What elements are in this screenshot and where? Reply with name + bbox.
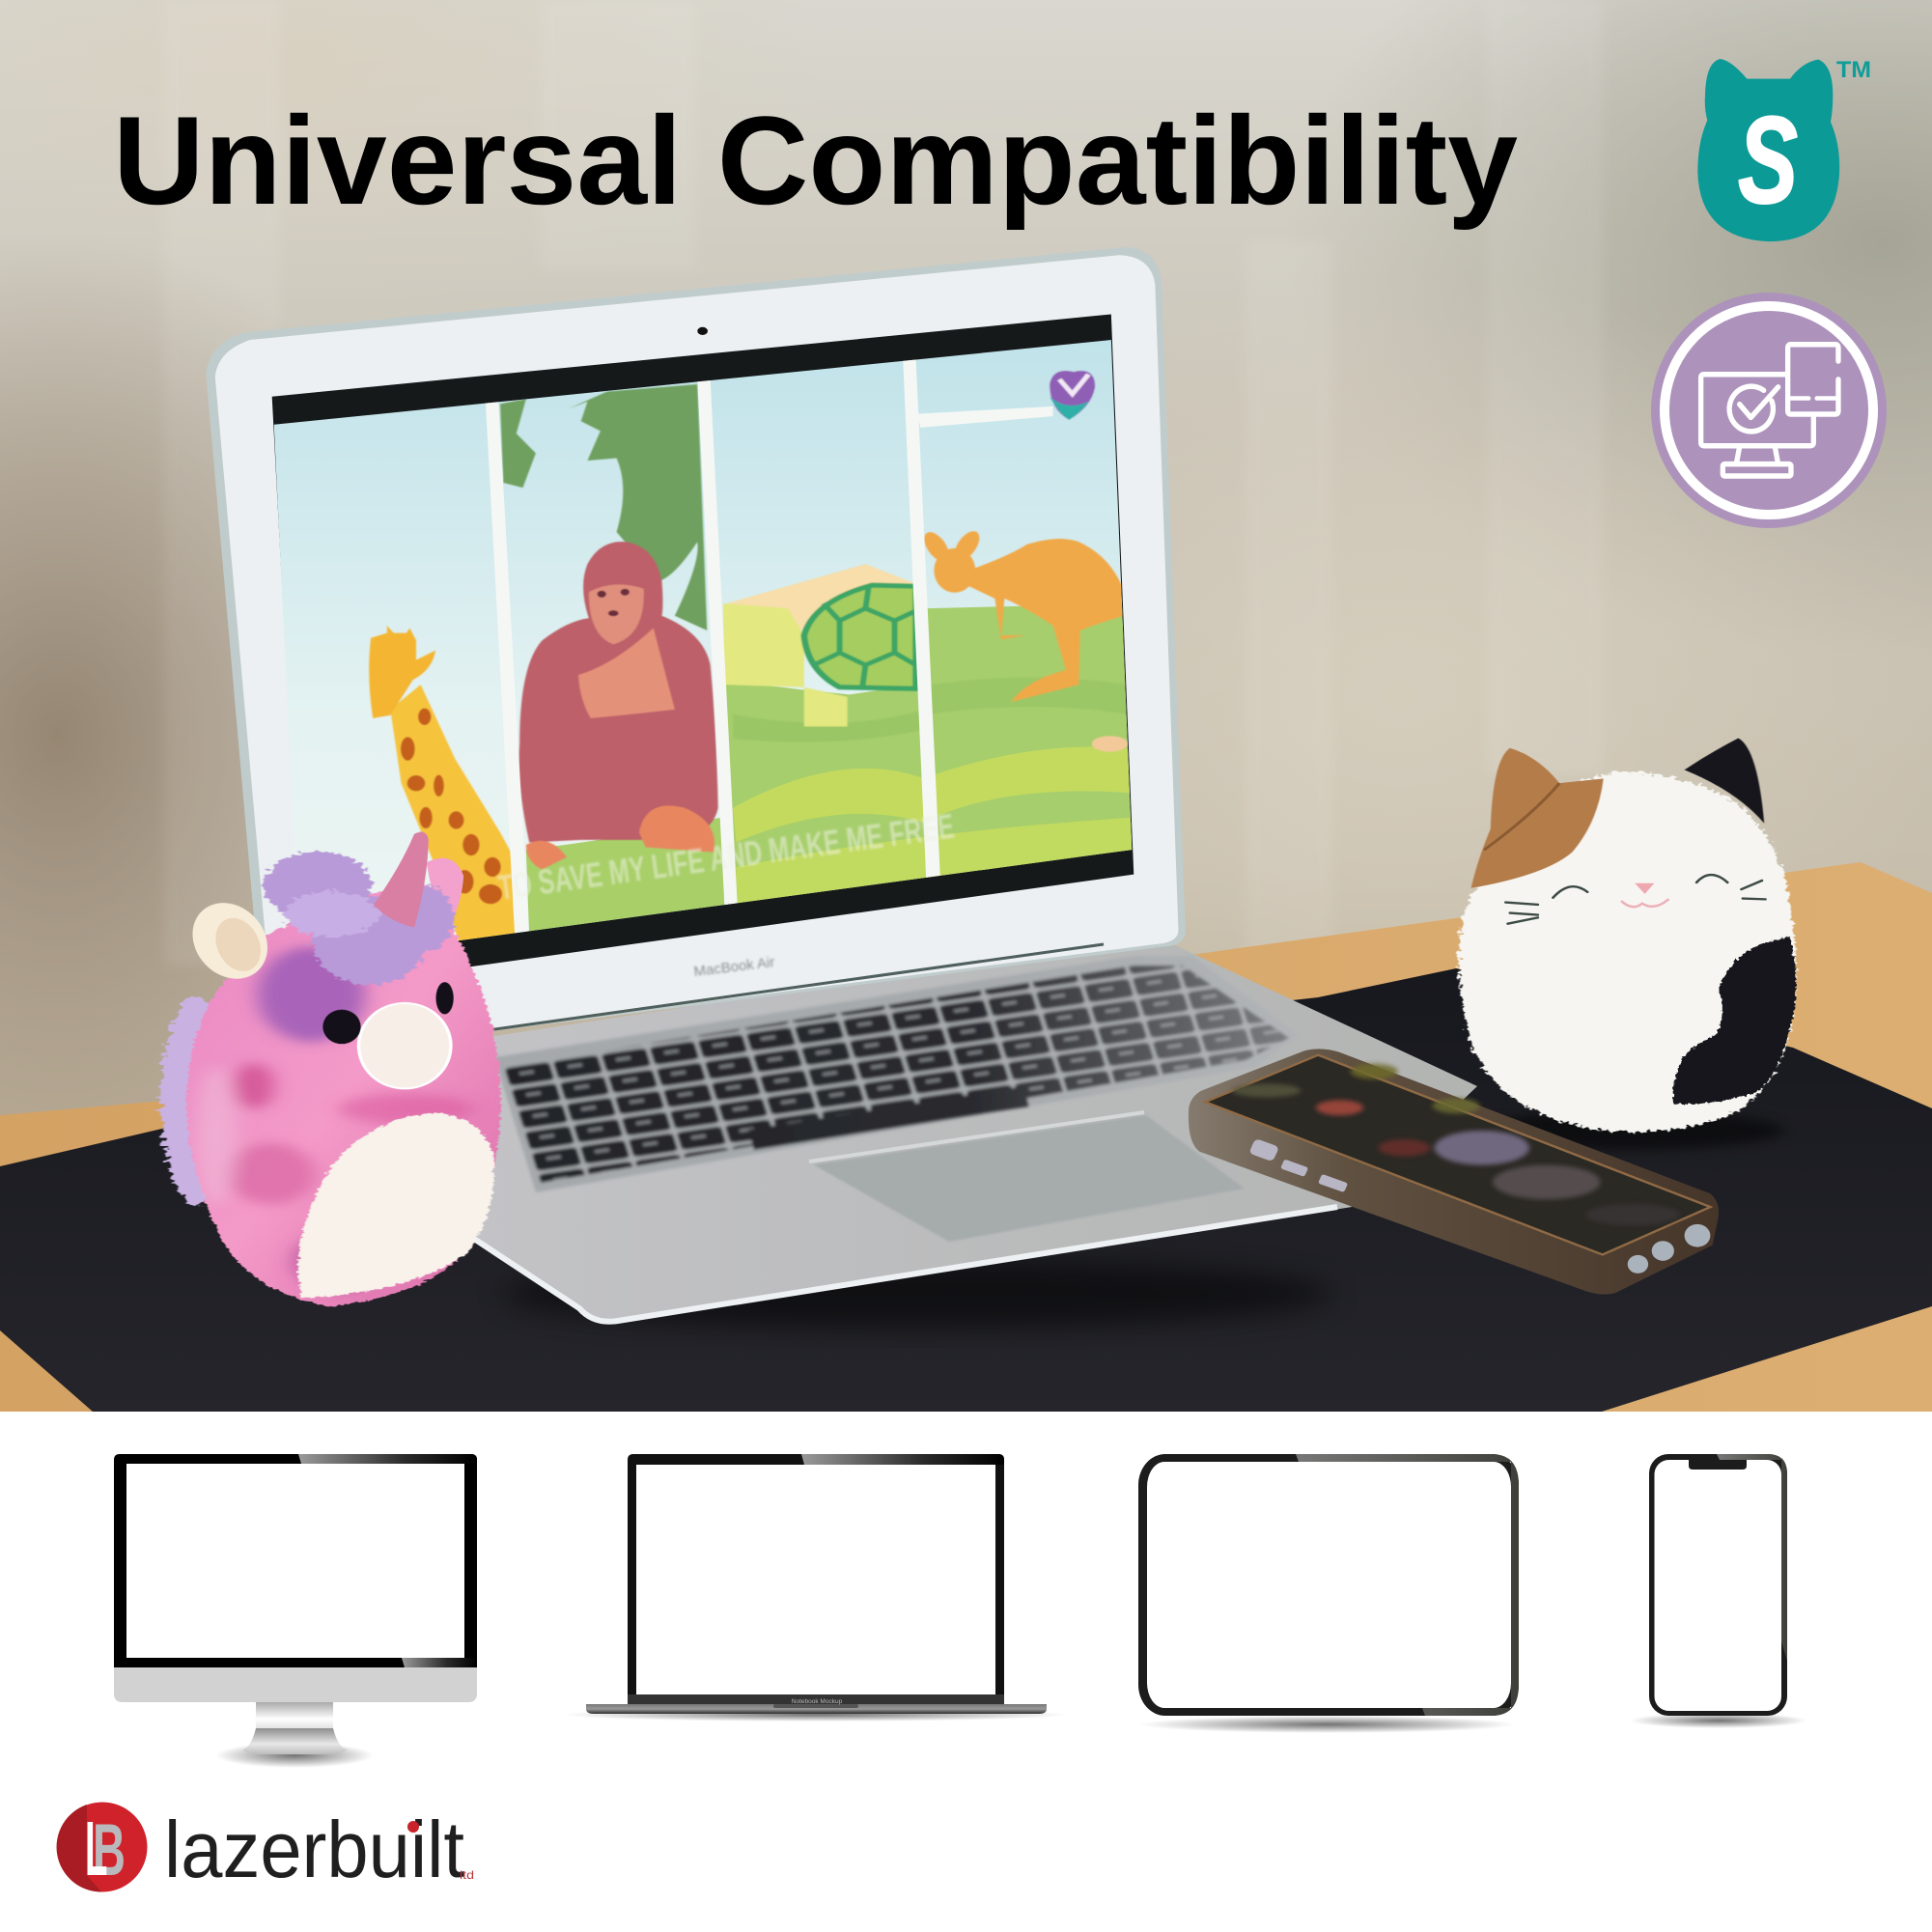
brown ear patch xyxy=(1471,748,1604,888)
video on screen xyxy=(258,330,1150,970)
right ear xyxy=(427,858,463,934)
tie-dye markings xyxy=(196,946,474,1292)
title: Universal Compatibility xyxy=(113,90,1518,231)
channel logo xyxy=(1050,371,1095,420)
black desk mat xyxy=(0,968,1932,1412)
phone screen xyxy=(1205,1055,1710,1254)
cat nose xyxy=(1635,883,1654,894)
unicorn tail xyxy=(161,996,232,1206)
tortoise xyxy=(723,564,916,727)
wooden desk xyxy=(0,862,1932,1412)
unicorn horn xyxy=(374,832,429,928)
unicorn mane xyxy=(264,852,454,985)
lb emblem xyxy=(57,1802,147,1892)
icon: smartphone xyxy=(1630,1454,1807,1728)
laptop brand text: MacBook Air xyxy=(693,954,775,980)
trademark: TM xyxy=(1836,57,1871,83)
icon: laptop xyxy=(563,1454,1069,1722)
laptop xyxy=(206,247,1477,1328)
giraffe xyxy=(369,626,517,951)
video caption: TO SAVE MY LIFE AND MAKE ME FREE xyxy=(496,806,957,908)
black body patch xyxy=(1673,936,1796,1105)
wall background xyxy=(0,0,1932,1412)
smartphone xyxy=(1189,1049,1719,1295)
left ear xyxy=(184,900,275,982)
icon: desktop monitor xyxy=(114,1454,477,1768)
lb emblem: L xyxy=(85,1806,107,1892)
webcam xyxy=(697,327,708,335)
lb emblem: B xyxy=(93,1810,126,1891)
grass xyxy=(526,599,1137,936)
lazerbuilt wordmark: lazerbuilt xyxy=(164,1805,464,1894)
logo: lazerbuilt xyxy=(57,1802,474,1894)
icon: device compatibility badge xyxy=(1651,293,1887,528)
tree xyxy=(500,384,707,630)
laptop label: Notebook Mockup xyxy=(792,1698,843,1705)
laptop lid and screen xyxy=(206,247,1186,1034)
black ear xyxy=(1685,739,1764,824)
keyboard xyxy=(494,956,1299,1192)
panel dividers xyxy=(486,359,1053,940)
laptop base xyxy=(473,942,1477,1328)
ltd suffix: ltd xyxy=(460,1868,474,1882)
gorilla xyxy=(518,542,718,870)
S letter: S xyxy=(1738,92,1798,230)
screen bezel xyxy=(272,315,1134,985)
unicorn eyes xyxy=(322,982,454,1044)
plush: calico cat xyxy=(1459,739,1796,1150)
cat face xyxy=(1505,875,1766,924)
unicorn belly xyxy=(298,1112,494,1298)
unicorn body xyxy=(186,883,501,1306)
icon: tablet xyxy=(1138,1454,1519,1733)
kangaroo xyxy=(919,528,1128,752)
phone buttons xyxy=(1248,1138,1348,1192)
logo: squishmallows S mark xyxy=(1697,57,1871,241)
plush: pink unicorn xyxy=(161,832,501,1306)
unicorn muzzle xyxy=(358,1003,451,1088)
